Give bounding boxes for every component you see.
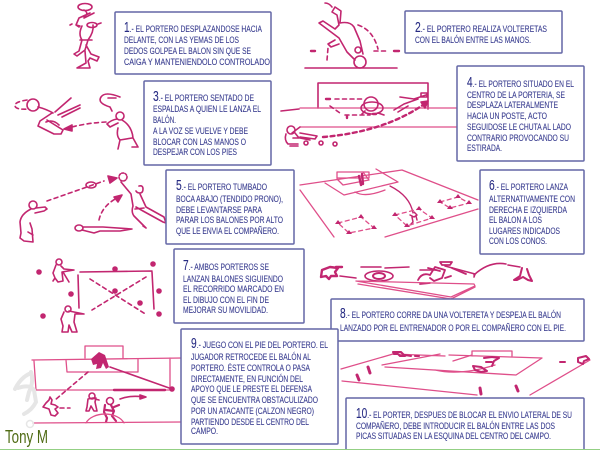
text box 7: LANZAN BALONES SIGUIENDO <box>183 274 283 285</box>
text box 9: QUE SE ENCUENTRA OBSTACULIZADO <box>191 395 318 406</box>
illustration: somersault with ball <box>305 3 399 68</box>
illustration: keeper in goal diving <box>281 83 457 146</box>
text box 1: DEDOS GOLPEA EL BALON SIN QUE SE <box>124 46 251 57</box>
exercise 9 panel <box>32 329 338 444</box>
text box 7: MEJORAR SU MOVILIDAD. <box>183 305 268 316</box>
text box 2: CON EL BALÓN ENTRE LAS MANOS. <box>415 35 531 46</box>
text box 4: DESPLAZA LATERALMENTE <box>467 100 558 111</box>
text box 1: DELANTE, CON LAS YEMAS DE LOS <box>124 35 239 46</box>
illustration: seated keeper and thrower <box>15 94 138 149</box>
text box 1: CAIGA Y MANTENIENDOLO CONTROLADO <box>124 57 270 68</box>
text box 6: EL BALON A LOS <box>489 215 542 226</box>
text box 6: CON LOS CONOS. <box>489 236 547 247</box>
text box 9: CAMPO. <box>191 426 218 437</box>
text box 6: DERECHA E IZQUIERDA <box>489 205 567 216</box>
text box 7: 7.- AMBOS PORTEROS SE <box>183 258 269 274</box>
text box 3: 3.- EL PORTERO SENTADO DE <box>153 89 254 105</box>
text box 3 <box>144 81 271 165</box>
exercise 8 panel <box>321 262 584 341</box>
text box 6: LUGARES INDICADOS <box>489 226 560 237</box>
text box 2 <box>405 11 562 53</box>
text box 10 <box>346 398 584 450</box>
illustration: penalty area play with back pass <box>32 346 182 423</box>
text box 7: EL DIBUJO CON EL FIN DE <box>183 295 269 306</box>
text box 9: PARTIENDO DESDE EL CENTRO DEL <box>191 417 309 428</box>
text box 9: DIRECTAMENTE, EN FUNCIÓN DEL <box>191 374 303 385</box>
illustration: pitch with cone squares <box>300 169 478 237</box>
text box 4 <box>457 66 584 161</box>
text box 1: 1.- EL PORTERO DESPLAZANDOSE HACIA <box>124 20 262 36</box>
logo text: Tony M <box>5 427 48 447</box>
text box 8 <box>331 299 584 341</box>
text box 3: A LA VOZ SE VUELVE Y DEBE <box>153 126 248 137</box>
text box 9: POR UN ATACANTE (CALZON NEGRO) <box>191 406 314 417</box>
text box 2: 2.- EL PORTERO REALIZA VOLTERETAS <box>415 20 547 36</box>
text box 3: DESPEJAR CON LOS PIES <box>153 147 237 158</box>
exercise 2 panel <box>305 3 562 68</box>
text box 5: DEBE LEVANTARSE PARA <box>176 205 262 216</box>
illustration: goalkeeper tapping ball <box>70 4 101 68</box>
text box 3: BLOCAR CON LAS MANOS O <box>153 137 246 148</box>
text box 1 <box>115 12 271 74</box>
text box 4: HACIA UN POSTE, ACTO <box>467 111 547 122</box>
text box 5: BOCA ABAJO (TENDIDO PRONO), <box>176 194 283 205</box>
text box 5 <box>166 170 294 244</box>
illustration: somersault and clearance <box>321 262 532 299</box>
text box 9: 9.- JUEGO CON EL PIE DEL PORTERO. EL <box>191 336 328 352</box>
text box 6 <box>480 170 584 254</box>
text box 9: APOYO QUE LE PRESTE EL DEFENSA <box>191 384 312 395</box>
text box 3: ESPALDAS A QUIEN LE LANZA EL <box>153 104 261 115</box>
text box 7 <box>174 249 304 323</box>
illustration: prone keeper rising to catch high ball <box>20 173 166 242</box>
exercise 10 panel <box>341 351 590 450</box>
exercise 7 panel <box>37 249 304 332</box>
text box 9 <box>181 329 338 444</box>
text box 7: EL RECORRIDO MARCADO EN <box>183 284 284 295</box>
text box 9: PORTERO. ÉSTE CONTROLA O PASA <box>191 363 310 374</box>
illustration: pitch corner with two poles <box>341 351 590 395</box>
bottom green rule <box>0 449 600 450</box>
text box 5: PARAR LOS BALONES POR ALTO <box>176 215 283 226</box>
text box 6: 6.- EL PORTERO LANZA <box>489 178 568 194</box>
text box 4: ESTIRADA. <box>467 143 502 154</box>
exercise 1 panel <box>70 4 271 74</box>
exercise 5 panel <box>20 170 294 244</box>
exercise 4 panel <box>281 66 584 161</box>
watermark: Tony M logo <box>5 372 48 447</box>
illustration: two keepers and goal with crossing routes <box>37 259 161 332</box>
text box 5: QUE LE ENVIA EL COMPAÑERO. <box>176 226 279 237</box>
text box 5: 5.- EL PORTERO TUMBADO <box>176 178 267 194</box>
exercise 3 panel <box>15 81 271 165</box>
text box 3: BALÓN. <box>153 115 176 126</box>
exercise 6 panel <box>300 169 584 254</box>
icon: grey player silhouette <box>15 372 36 428</box>
text box 9: JUGADOR RETROCEDE EL BALÓN AL <box>191 352 311 363</box>
